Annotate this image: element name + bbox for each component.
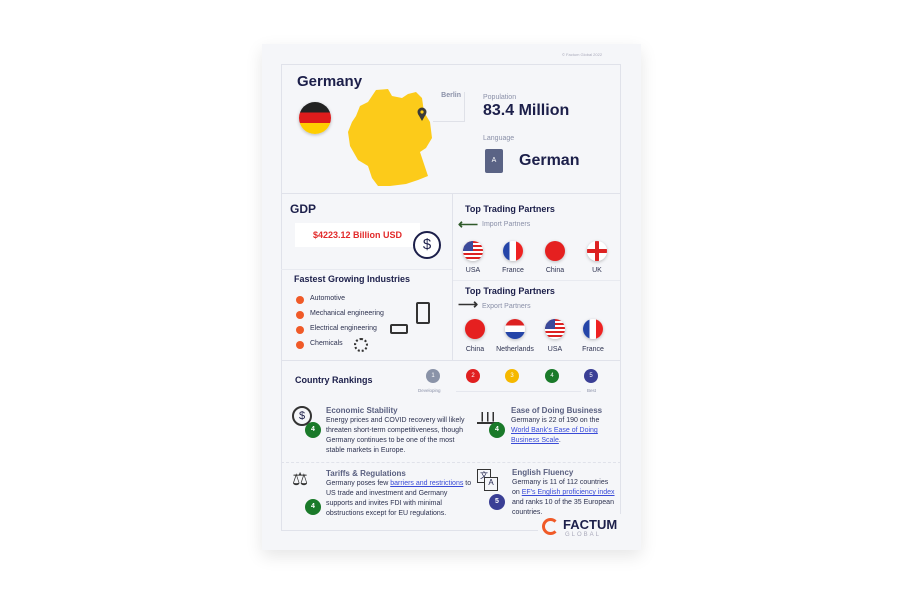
block: English Fluency: 5 xyxy=(495,498,499,505)
population block: Population xyxy=(483,94,516,101)
Berlin label: Berlin xyxy=(441,92,461,99)
ranking scale: Best xyxy=(587,388,596,393)
map: Germany xyxy=(348,89,432,186)
icon: language: A xyxy=(492,157,496,164)
panel: GDP: GDP xyxy=(290,202,316,216)
icon: import arrow: ⟵ xyxy=(458,216,478,232)
block: English Fluency xyxy=(477,468,615,516)
population block: 83.4 Million xyxy=(483,102,569,119)
icon: language xyxy=(485,149,503,173)
panel: export partners xyxy=(458,286,604,353)
block: Ease of Doing Business: Germany is 22 of 190 on the World Bank's Ease of Doing Business Scale. xyxy=(511,417,599,444)
panel: import partners: UK xyxy=(592,267,602,274)
icons: industries xyxy=(416,302,430,324)
panel: import partners xyxy=(458,204,608,274)
ranking scale: 5 xyxy=(589,373,593,379)
panel: fastest growing industries: Mechanical engineering xyxy=(310,310,384,317)
panel: fastest growing industries: Fastest Growing Industries xyxy=(294,274,410,284)
block: English Fluency: A xyxy=(488,478,494,487)
title: Germany: Germany xyxy=(297,73,362,90)
block: Economic Stability: $ xyxy=(299,410,305,422)
icon: dollar coin xyxy=(413,231,441,259)
language block xyxy=(483,135,579,173)
page card xyxy=(262,44,641,550)
logo: Factum Global: GLOBAL xyxy=(565,532,601,538)
icon: export arrow: ⟶ xyxy=(458,296,478,312)
block: Ease of Doing Business: Ease of Doing Business xyxy=(511,406,602,415)
ranking scale: 4 xyxy=(550,373,554,379)
panel: export partners: Top Trading Partners xyxy=(465,286,555,296)
panel: export partners: Export Partners xyxy=(482,303,531,310)
block: Economic Stability: 4 xyxy=(311,426,315,433)
panel: fastest growing industries: Chemicals xyxy=(310,340,343,347)
icon: Berlin pin xyxy=(418,108,426,121)
icon: German flag xyxy=(299,102,331,134)
population block xyxy=(483,94,569,119)
panel: export partners: Netherlands xyxy=(496,346,534,353)
panel: import partners: Top Trading Partners xyxy=(465,204,555,214)
block: Economic Stability: Economic Stability xyxy=(326,406,398,415)
panel: fastest growing industries: Electrical engineering xyxy=(310,325,377,332)
panel: export partners: France xyxy=(582,346,604,353)
GDP value box: $4223.12 Billion USD xyxy=(313,230,402,240)
block: Tariffs & Regulations: Germany poses few barriers and restrictions to US trade and investment and Germany supports and invites FDI with minimal obstructions except for EU regulations. xyxy=(326,480,471,517)
block: English Fluency: 文 xyxy=(480,471,488,480)
block: Ease of Doing Business: 4 xyxy=(495,426,499,433)
ranking scale: Developing xyxy=(418,388,441,393)
block: Tariffs & Regulations xyxy=(292,469,471,517)
Berlin label xyxy=(433,92,465,122)
ranking scale: 3 xyxy=(510,373,514,379)
panel: export partners: USA xyxy=(548,346,562,353)
icon: dollar coin: $ xyxy=(423,236,431,253)
ranking scale: 1 xyxy=(431,373,435,379)
block: Tariffs & Regulations: ⚖ xyxy=(292,469,308,489)
panel: import partners: France xyxy=(502,267,524,274)
language block: Language xyxy=(483,135,514,142)
ranking scale xyxy=(418,369,598,393)
block: English Fluency: Germany is 11 of 112 countries on EF's English proficiency index and ranks 10 of the 35 European countries. xyxy=(512,479,615,516)
block: Tariffs & Regulations: 4 xyxy=(311,503,315,510)
panel: import partners: China xyxy=(546,267,564,274)
GDP value box xyxy=(295,223,420,247)
panel: fastest growing industries xyxy=(294,274,430,352)
logo: Factum Global xyxy=(538,514,638,544)
block: English Fluency: English Fluency xyxy=(512,468,573,477)
heading: Country Rankings: Country Rankings xyxy=(295,375,373,385)
copyright: © Factum Global 2022 xyxy=(562,52,602,57)
block: Economic Stability: Energy prices and COVID recovery will likely threaten short-term competitiveness, though Germany continues to be one of the most stable markets in Europe. xyxy=(326,417,464,454)
language block: German xyxy=(519,152,579,169)
block: Tariffs & Regulations: Tariffs & Regulations xyxy=(326,469,406,478)
panel: GDP xyxy=(290,202,441,259)
inner frame xyxy=(281,64,621,531)
logo: Factum Global: FACTUM xyxy=(563,517,617,532)
panel: import partners: Import Partners xyxy=(482,221,530,228)
ranking scale: 2 xyxy=(471,373,475,379)
panel: fastest growing industries: Automotive xyxy=(310,295,345,302)
panel: export partners: China xyxy=(466,346,484,353)
block: Ease of Doing Business xyxy=(477,406,602,444)
block: Economic Stability xyxy=(292,406,464,454)
panel: import partners: USA xyxy=(466,267,480,274)
